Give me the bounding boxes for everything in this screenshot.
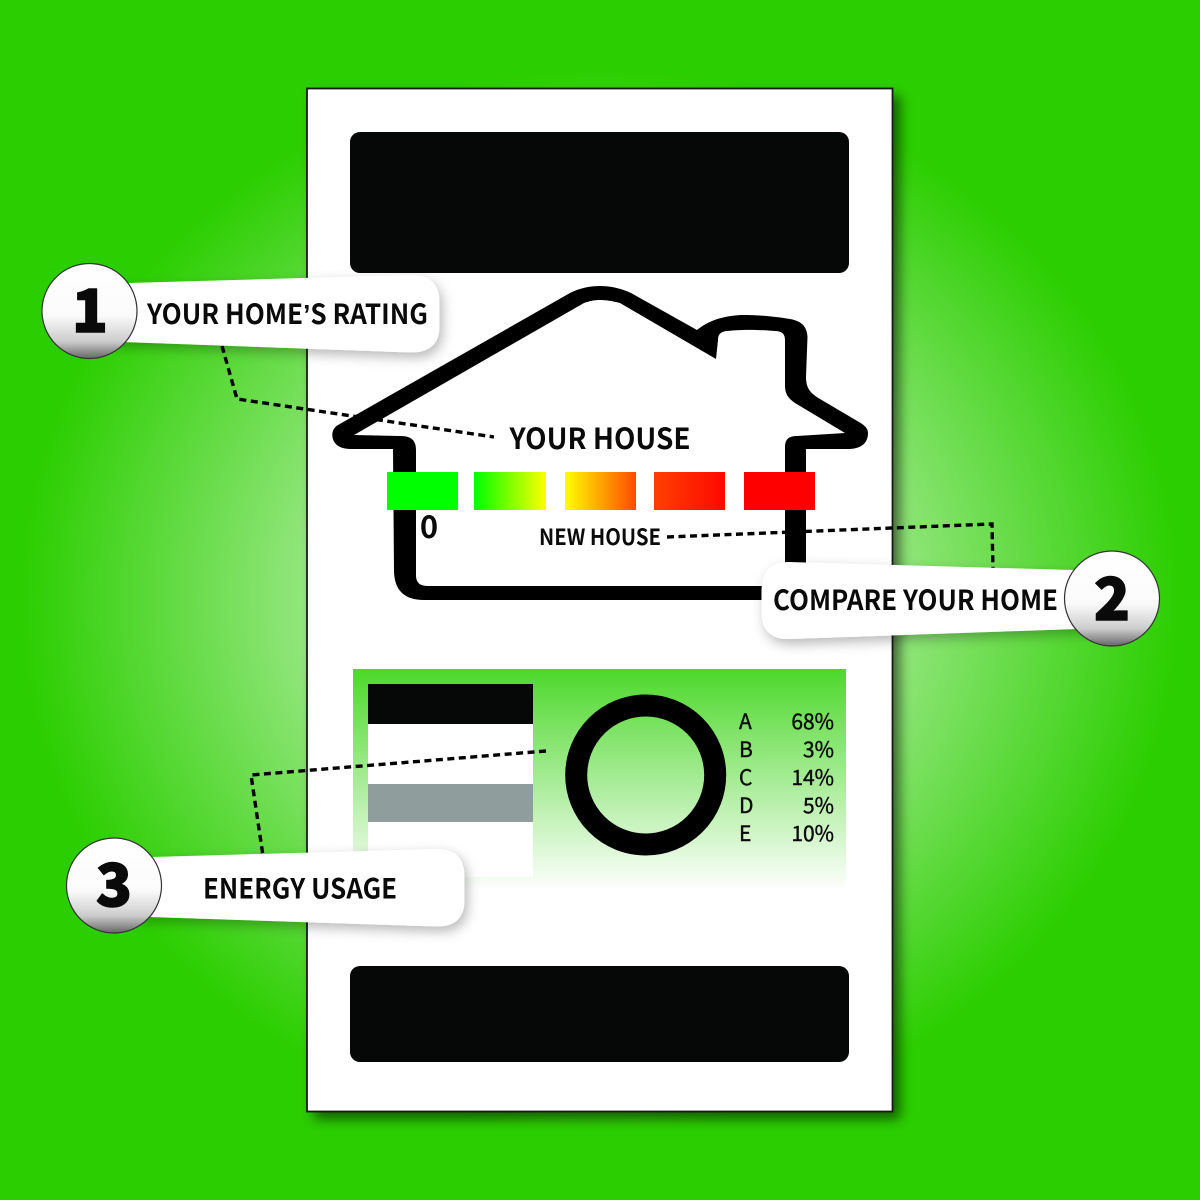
grey bar <box>368 784 533 822</box>
top black bar <box>350 132 849 273</box>
scale segment 2 <box>474 472 546 510</box>
connector 2 <box>667 524 993 570</box>
connector 3 <box>251 751 546 856</box>
panel: document page <box>307 88 892 1112</box>
callout 3 <box>66 838 464 933</box>
legend row C <box>739 762 834 792</box>
callout 2 ball <box>1064 551 1160 646</box>
legend row D: D <box>739 790 753 820</box>
legend row C: C <box>739 762 752 792</box>
callout 3 text: ENERGY USAGE <box>203 868 397 908</box>
scale segment 3 <box>565 472 636 510</box>
callout 1 ball <box>42 264 137 358</box>
connector 1 <box>222 346 494 437</box>
legend row A: 68% <box>791 706 834 736</box>
legend row A <box>739 706 834 736</box>
callout 2 <box>762 551 1160 646</box>
callout 2 text: COMPARE YOUR HOME <box>773 579 1058 619</box>
legend row E <box>739 818 834 848</box>
white bar <box>368 724 533 784</box>
legend row B: 3% <box>803 734 834 764</box>
callout 2 pill <box>762 562 1090 639</box>
scale segment 4 <box>654 472 725 510</box>
legend <box>739 706 834 848</box>
callout 1 pill <box>110 275 440 353</box>
callout 1 number: 1 <box>72 264 108 349</box>
callout 3 pill <box>135 849 464 927</box>
icon: house outline <box>332 286 868 600</box>
white lower bar <box>368 822 533 877</box>
legend row C: 14% <box>791 762 834 792</box>
legend row B: B <box>739 734 753 764</box>
black bar <box>368 684 533 724</box>
new house label: NEW HOUSE <box>539 520 661 552</box>
callout 2 number: 2 <box>1094 552 1130 637</box>
callout 1 text: YOUR HOME’S RATING <box>146 293 428 333</box>
legend row A: A <box>739 706 752 736</box>
house label: YOUR HOUSE <box>509 416 690 458</box>
callout 3 number: 3 <box>96 838 132 923</box>
legend row D: 5% <box>803 790 834 820</box>
legend row E: 10% <box>791 818 834 848</box>
bottom black bar <box>350 966 849 1062</box>
legend row D <box>739 790 834 820</box>
scale segment 5 <box>744 472 815 510</box>
donut chart <box>576 706 715 844</box>
legend row B <box>739 734 834 764</box>
scale segment 1 <box>387 472 458 510</box>
bar stack <box>368 684 533 877</box>
panel: energy usage <box>353 669 846 891</box>
legend row E: E <box>739 818 751 848</box>
callout 1 <box>42 264 440 358</box>
callout 3 ball <box>66 838 162 933</box>
page shadow <box>314 96 900 1119</box>
scale zero label: 0 <box>420 502 438 547</box>
rating scale <box>387 472 815 510</box>
